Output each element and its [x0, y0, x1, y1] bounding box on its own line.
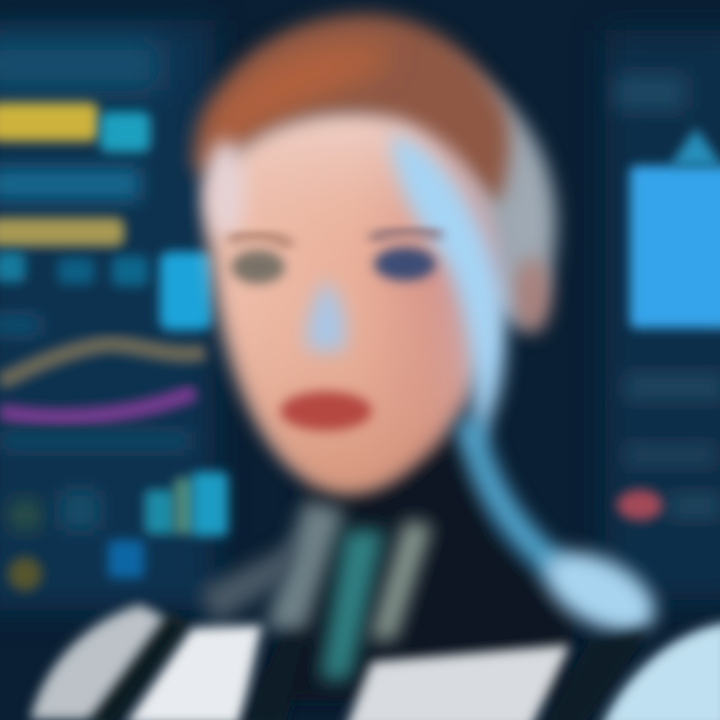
red dot: [617, 490, 663, 520]
hair and headband: [192, 14, 556, 333]
tan wavy line chart: [0, 344, 205, 382]
right brow: [370, 230, 442, 240]
bright cyan tile: [160, 252, 212, 330]
lips: [280, 391, 372, 431]
cyan bar: [100, 112, 150, 152]
blue light on cheek: [390, 135, 505, 450]
neck: [260, 430, 575, 700]
nose: [307, 280, 346, 352]
second gold bar: [0, 218, 124, 246]
left pale side of face: [205, 140, 245, 240]
blue row: [0, 315, 40, 335]
auburn hair: [192, 14, 510, 205]
bottom band: [0, 432, 190, 450]
blue text band: [0, 168, 140, 200]
gold bar: [0, 103, 98, 141]
purple line chart: [0, 392, 195, 417]
ear: [513, 257, 551, 333]
bottom chart tiles: [8, 472, 228, 591]
collar with teal stripe: [200, 500, 432, 680]
panel: right dashboard: [605, 30, 720, 600]
blue hose at neck: [470, 420, 668, 648]
left brow: [228, 234, 292, 246]
face: [205, 116, 505, 490]
left eye: [231, 250, 285, 284]
grey text rows: [625, 375, 720, 399]
body: white suit: [30, 605, 720, 720]
cyan data dots: [0, 252, 148, 286]
grey band: [420, 50, 556, 330]
teal tip: [670, 128, 720, 166]
bright blue tile: [630, 166, 720, 328]
panel: left dashboard: [0, 20, 228, 610]
right eye: [374, 247, 436, 281]
